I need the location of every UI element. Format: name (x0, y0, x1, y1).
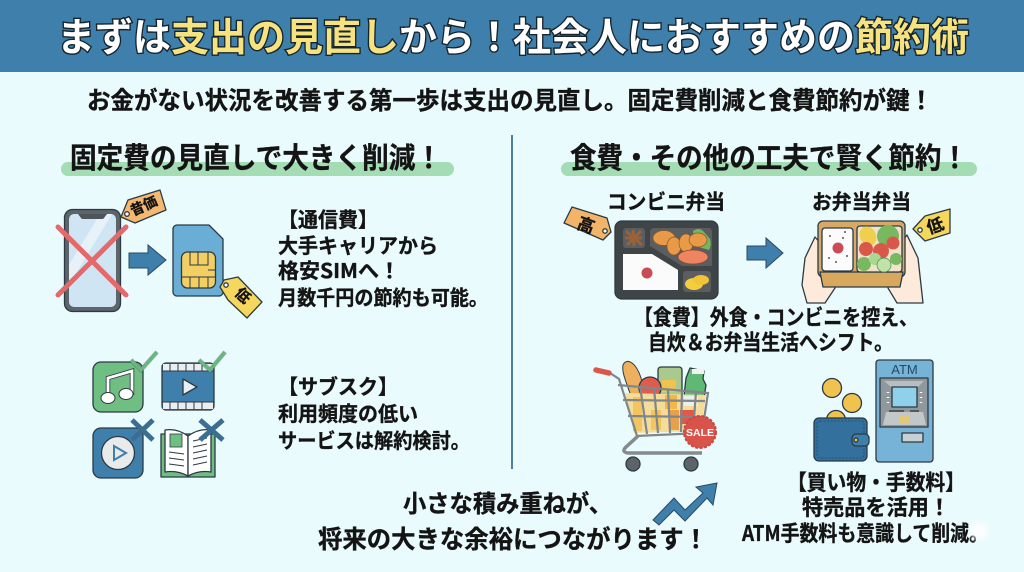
text: shopping and fees: 特売品を活用！ (802, 491, 950, 522)
icon: expensive price tag: 昔価 (127, 191, 161, 221)
left heading: 固定費の見直しで大きく削減！ (70, 135, 442, 177)
icon: high price tag: 高 (574, 209, 599, 239)
subtitle: お金がない状況を改善する第一歩は支出の見直し。固定費削減と食費節約が鍵！ (87, 82, 933, 117)
label: homemade bento: お弁当弁当 (812, 185, 911, 215)
left heading highlight (61, 162, 454, 176)
icon: shopping cart with sale badge: SALE (686, 427, 714, 439)
closing message: 小さな積み重ねが、 (403, 484, 612, 519)
closing message (318, 484, 708, 556)
text: shopping and fees: ATM手数料も意識して削減。 (741, 517, 988, 548)
text: telecom costs (278, 203, 488, 311)
icon: wallet with coins (814, 378, 869, 461)
arrow: phone to SIM (129, 245, 166, 275)
icon: e-book cancelled (161, 420, 223, 477)
text: telecom costs: 【通信費】 (278, 203, 378, 233)
icon: low price tag: 低 (230, 283, 256, 308)
right heading highlight (561, 162, 977, 176)
icon: player app cancelled (93, 420, 153, 478)
text: food costs: 自炊＆お弁当生活へシフト。 (648, 326, 893, 357)
icon: ATM: ATM (891, 362, 918, 377)
icon: rising trend arrow (653, 483, 717, 525)
text: food costs: 【食費】外食・コンビニを控え、 (634, 301, 918, 332)
right heading: 食費・その他の工夫で賢く節約！ (570, 135, 968, 177)
icon: shopping cart with sale badge (596, 361, 716, 471)
text: telecom costs: 月数千円の節約も可能。 (278, 281, 488, 311)
closing message: 将来の大きな余裕につながります！ (318, 520, 708, 556)
icon: convenience bento tray (615, 221, 718, 299)
text: subscriptions (278, 370, 470, 454)
icon: high price tag (564, 207, 611, 240)
text: telecom costs: 格安SIMへ！ (278, 254, 400, 284)
icon: phone crossed out (58, 210, 126, 312)
title: まずは支出の見直しから！社会人におすすめの節約術 (57, 7, 969, 63)
text: telecom costs: 大手キャリアから (278, 229, 438, 259)
icon: hands holding homemade bento (802, 221, 923, 303)
text: shopping and fees (741, 466, 988, 548)
text: subscriptions: サービスは解約検討。 (278, 424, 470, 454)
text: subscriptions: 利用頻度の低い (278, 397, 418, 427)
icon: SIM card (173, 225, 223, 296)
header band (0, 0, 1024, 72)
text: food costs (634, 301, 918, 357)
arrow: to homemade bento (747, 238, 783, 268)
text: subscriptions: 【サブスク】 (278, 370, 398, 400)
icon: expensive price tag (121, 190, 166, 223)
label: convenience store bento: コンビニ弁当 (607, 185, 725, 215)
icon: video app kept (162, 352, 225, 410)
icon: low price tag for bento: 低 (923, 210, 947, 239)
panel: food and others (561, 135, 988, 548)
icon: low price tag (220, 277, 262, 318)
video watermark glow (970, 522, 988, 540)
icon: low price tag for bento (913, 209, 950, 241)
center divider (511, 135, 513, 469)
panel: fixed costs (58, 135, 488, 478)
text: shopping and fees: 【買い物・手数料】 (787, 466, 965, 497)
icon: music app kept (93, 352, 157, 412)
icon: ATM (876, 360, 933, 462)
